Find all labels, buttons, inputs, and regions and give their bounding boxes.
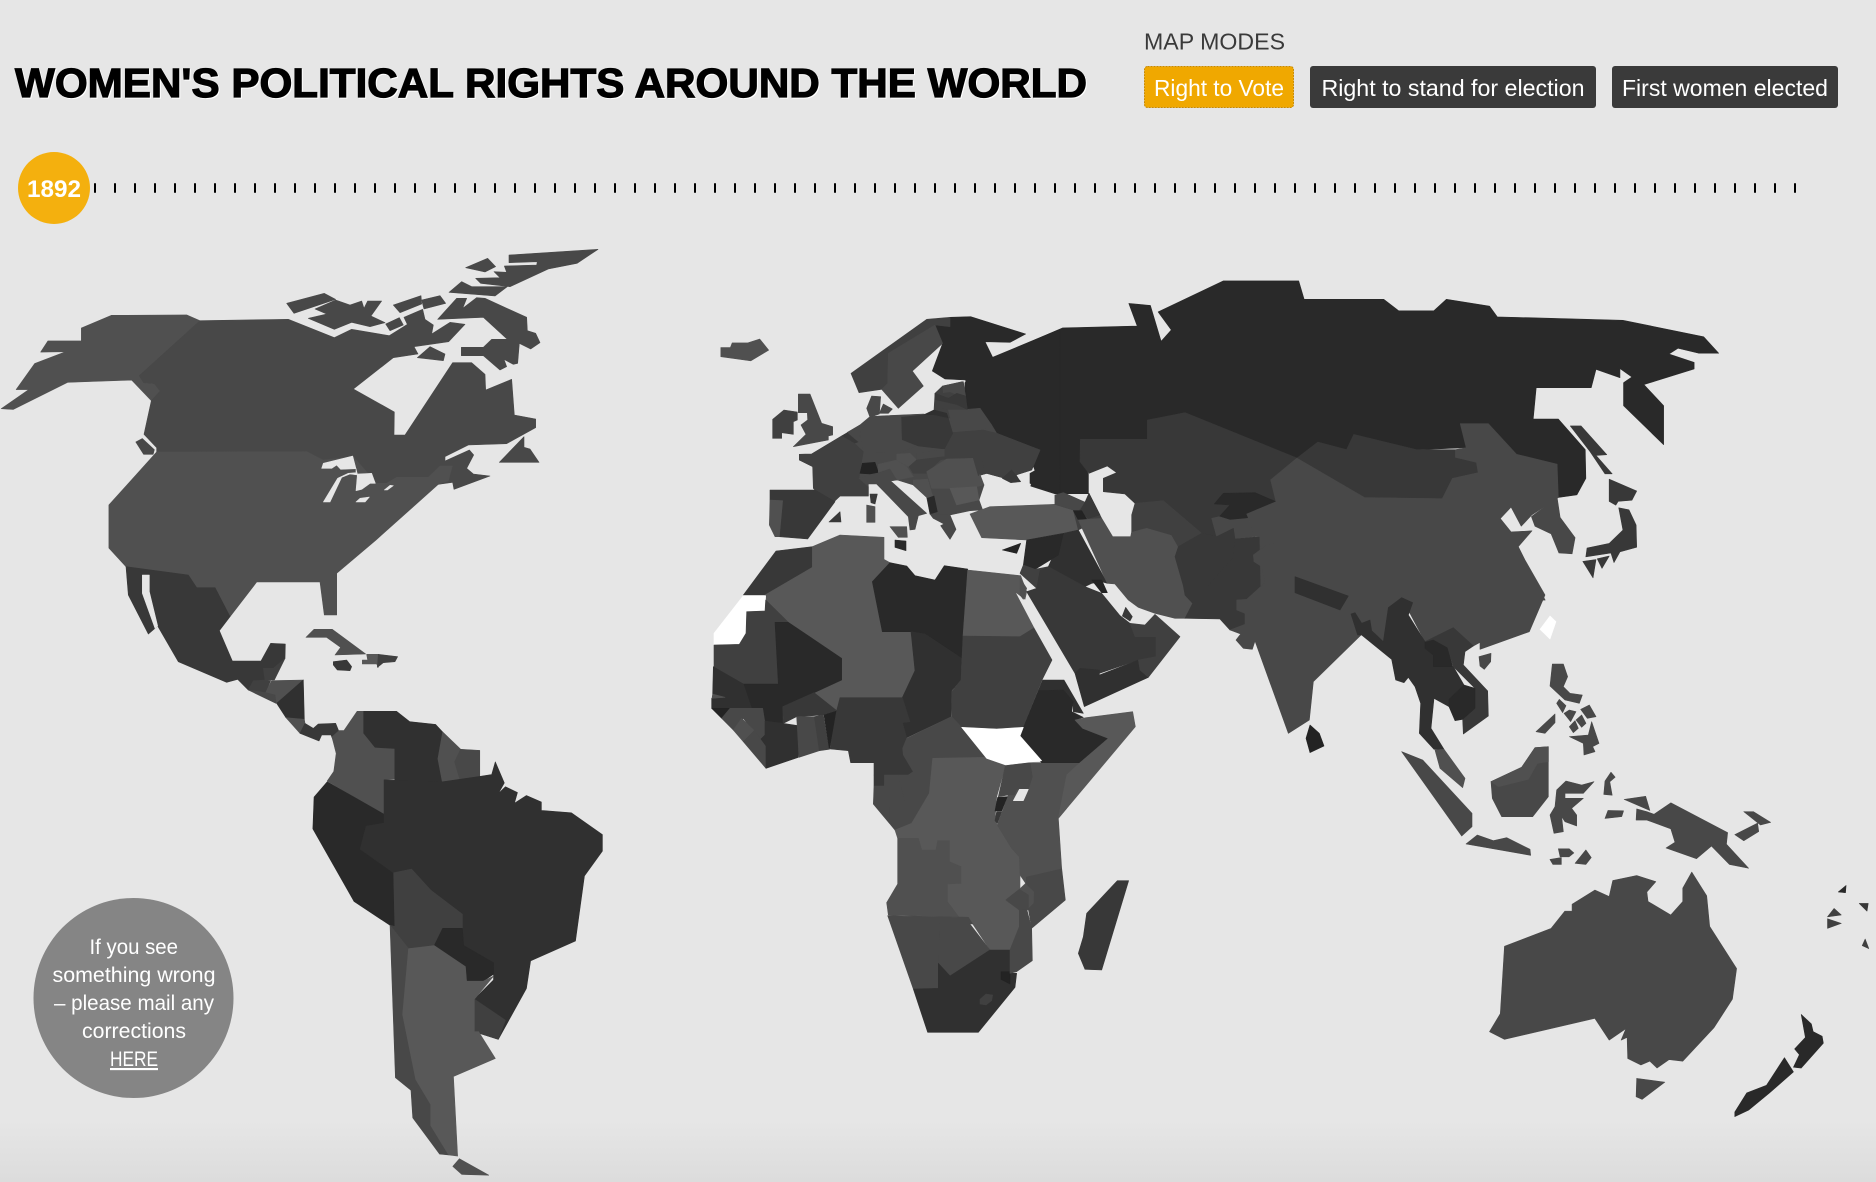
Caspian Sea — [1089, 466, 1132, 537]
continental Europe base — [799, 408, 1040, 518]
year marker — [18, 152, 90, 224]
Caribbean islands — [306, 629, 398, 671]
Ukraine — [937, 430, 1040, 478]
Kenya and Tanzania north — [997, 763, 1080, 883]
Cambodia — [1449, 685, 1475, 721]
Georgia — [1055, 493, 1085, 511]
Somalia — [1058, 712, 1135, 818]
Nigeria — [830, 698, 913, 775]
Austria — [878, 460, 913, 480]
map: South and Southeast Asia — [1230, 543, 1599, 855]
Ireland — [773, 410, 797, 438]
Iraq — [1048, 530, 1107, 587]
Tajikistan — [1212, 517, 1255, 539]
Syria — [1023, 533, 1063, 569]
callout: corrections: something wrong — [52, 963, 216, 987]
Germany — [860, 417, 917, 453]
Slovakia — [917, 449, 944, 460]
France — [799, 436, 868, 502]
Cameroon and Congo — [889, 717, 987, 830]
Burma, Thailand and Malay Peninsula — [1351, 598, 1464, 749]
map: Europe — [721, 317, 1040, 553]
Lesotho — [980, 994, 993, 1005]
Hungary — [909, 457, 944, 473]
Laos — [1425, 639, 1453, 667]
DR Congo and Zambia — [895, 757, 1020, 950]
Brazil — [360, 762, 602, 1039]
New Zealand — [1735, 1014, 1823, 1117]
Vietnam — [1425, 628, 1488, 734]
South Africa — [913, 950, 1017, 1032]
Argentina — [403, 946, 495, 1156]
Moldova — [973, 458, 984, 476]
Egypt — [963, 570, 1034, 637]
Venezuela — [364, 711, 443, 784]
Niger and Chad — [902, 632, 962, 738]
Turkmenistan and Uzbekistan — [1132, 501, 1202, 547]
Jordan — [1020, 565, 1048, 588]
Croatia and Bosnia — [913, 479, 933, 498]
Gabon — [873, 775, 907, 830]
Albania — [927, 496, 937, 514]
Chile — [390, 925, 449, 1155]
callout: corrections: If you see — [90, 935, 178, 959]
Sierra Leone — [733, 718, 754, 742]
button: Right to Vote (active) — [1144, 66, 1294, 108]
Western Sahara — [714, 596, 766, 644]
map: Oceania — [1490, 772, 1869, 1117]
title: WOMEN'S POLITICAL RIGHTS AROUND THE WORLD — [16, 61, 1088, 107]
Sulawesi — [1550, 781, 1594, 833]
Japan — [1583, 479, 1637, 578]
South Sudan (white) — [962, 727, 1042, 765]
Mongolia — [1297, 434, 1478, 499]
Netherlands — [842, 432, 858, 443]
USA — [109, 452, 452, 617]
Benin — [824, 711, 838, 749]
Peru — [313, 782, 395, 926]
Baltic states — [923, 382, 967, 418]
Uruguay — [474, 999, 505, 1039]
Kuwait — [1092, 580, 1107, 593]
Ivory Coast — [761, 721, 798, 768]
Lake Malawi region — [1019, 883, 1034, 910]
Norway — [851, 317, 950, 393]
Belarus — [948, 408, 992, 433]
Kyrgyzstan — [1214, 493, 1276, 520]
Mali — [743, 622, 842, 723]
Baltic base — [923, 382, 967, 418]
map: North America — [1, 249, 598, 745]
Lake Victoria — [1013, 789, 1028, 801]
Paraguay — [434, 928, 494, 981]
Moluccas and nearby islands — [1550, 772, 1650, 864]
button: Right to stand for election: Right to stand for election — [1322, 75, 1584, 101]
Bulgaria — [950, 487, 979, 505]
Colombia — [327, 711, 395, 814]
callout: corrections: corrections — [82, 1019, 186, 1043]
Pacific islands — [1828, 885, 1869, 949]
Canada mainland — [139, 309, 536, 493]
button: Right to Vote (active): Right to Vote — [1154, 75, 1284, 101]
Liberia — [743, 731, 766, 768]
Libya — [872, 563, 968, 658]
Hainan — [1479, 653, 1491, 669]
Sweden — [882, 325, 943, 408]
Romania — [927, 458, 984, 488]
button: First women elected: First women elected — [1622, 75, 1828, 101]
callout: corrections: – please mail any — [54, 991, 214, 1015]
Malawi — [1006, 889, 1028, 910]
New Guinea — [1636, 803, 1749, 868]
Mexico — [126, 567, 285, 690]
Great Britain — [793, 394, 833, 447]
Morocco — [743, 547, 812, 595]
Swaziland — [1001, 972, 1010, 984]
Sakhalin — [1570, 426, 1612, 474]
Iceland — [721, 339, 769, 361]
Angola — [887, 838, 968, 917]
Nepal — [1295, 577, 1348, 610]
Uganda — [998, 763, 1032, 797]
Newfoundland — [499, 437, 539, 462]
Russia west — [932, 317, 1060, 494]
Pakistan — [1183, 537, 1275, 630]
Saudi Arabia — [1027, 567, 1156, 673]
Ghana — [797, 717, 819, 757]
Mozambique — [1010, 905, 1032, 973]
Taiwan (white) — [1540, 616, 1556, 639]
callout: corrections — [34, 898, 234, 1098]
Borneo — [1491, 747, 1548, 817]
Central America — [248, 658, 339, 745]
map: Africa — [712, 535, 1135, 1032]
Guyana — [438, 732, 461, 784]
Azerbaijan — [1080, 493, 1100, 518]
Arctic islands — [287, 249, 598, 370]
Mediterranean islands — [829, 470, 1021, 553]
Israel — [1020, 578, 1027, 599]
Solomon islands — [1735, 812, 1771, 841]
Rwanda — [995, 797, 1007, 811]
Suriname — [455, 749, 480, 782]
Equatorial Guinea — [874, 775, 885, 786]
Caucasus base — [1055, 493, 1102, 530]
Tasmania — [1636, 1078, 1665, 1099]
Bolivia — [390, 869, 462, 949]
map: South America — [313, 711, 602, 1175]
Iran — [1078, 518, 1193, 618]
Kazakhstan — [1080, 413, 1297, 537]
Italy — [859, 468, 927, 530]
Mauritania — [714, 600, 788, 684]
Eritrea — [1038, 680, 1083, 713]
Peninsular Malaysia — [1435, 749, 1465, 788]
Java — [1466, 835, 1531, 855]
Qatar — [1122, 607, 1132, 621]
Yemen — [1075, 660, 1148, 707]
Oman and UAE — [1130, 614, 1180, 677]
Madagascar — [1078, 881, 1129, 970]
button: First women elected — [1612, 66, 1838, 108]
Sudan — [952, 628, 1052, 729]
Czech Republic — [897, 453, 917, 467]
Switzerland — [860, 462, 878, 474]
Ethiopia — [1020, 690, 1108, 763]
Philippines — [1536, 664, 1599, 755]
Australia — [1490, 872, 1737, 1068]
Namibia — [888, 916, 973, 989]
Togo — [814, 715, 829, 751]
Tanzania — [1026, 868, 1065, 928]
timeline ticks — [94, 183, 1797, 193]
Sri Lanka — [1306, 725, 1324, 753]
Guinea-Bissau — [712, 708, 730, 718]
Turkey — [970, 504, 1078, 540]
Greece — [930, 514, 956, 539]
Alaska — [1, 315, 200, 409]
Denmark — [867, 396, 881, 417]
Guinea — [722, 708, 765, 740]
title: WOMEN'S POLITICAL RIGHTS AROUND THE WORLD — [15, 60, 1087, 106]
India and southern China — [1230, 543, 1545, 733]
Spain — [770, 490, 835, 539]
Afghanistan — [1175, 528, 1235, 586]
Vancouver Island — [136, 439, 154, 454]
year marker: 1892 — [27, 176, 81, 203]
Burkina Faso — [783, 693, 837, 723]
Senegal — [712, 667, 752, 708]
callout: corrections: HERE — [110, 1047, 158, 1071]
map: Russia and North Asia — [932, 281, 1719, 498]
Algeria — [765, 535, 915, 711]
Botswana — [938, 923, 990, 976]
button: Right to stand for election — [1310, 66, 1596, 108]
Burundi — [995, 812, 1002, 823]
Sumatra — [1402, 752, 1472, 836]
China — [1247, 424, 1558, 600]
Korea — [1531, 498, 1575, 554]
Poland — [901, 415, 953, 449]
Belgium — [847, 425, 860, 442]
Armenia — [1073, 511, 1087, 520]
Russia east — [965, 281, 1719, 498]
map: Middle East and Central Asia — [970, 413, 1297, 707]
map modes heading: MAP MODES — [1144, 28, 1285, 54]
Serbia — [927, 472, 972, 515]
Gulf of California — [142, 575, 158, 628]
Tierra del Fuego — [453, 1159, 489, 1175]
Great Lakes — [322, 456, 393, 502]
map: East Asia — [1247, 424, 1637, 600]
Portugal — [769, 500, 783, 537]
